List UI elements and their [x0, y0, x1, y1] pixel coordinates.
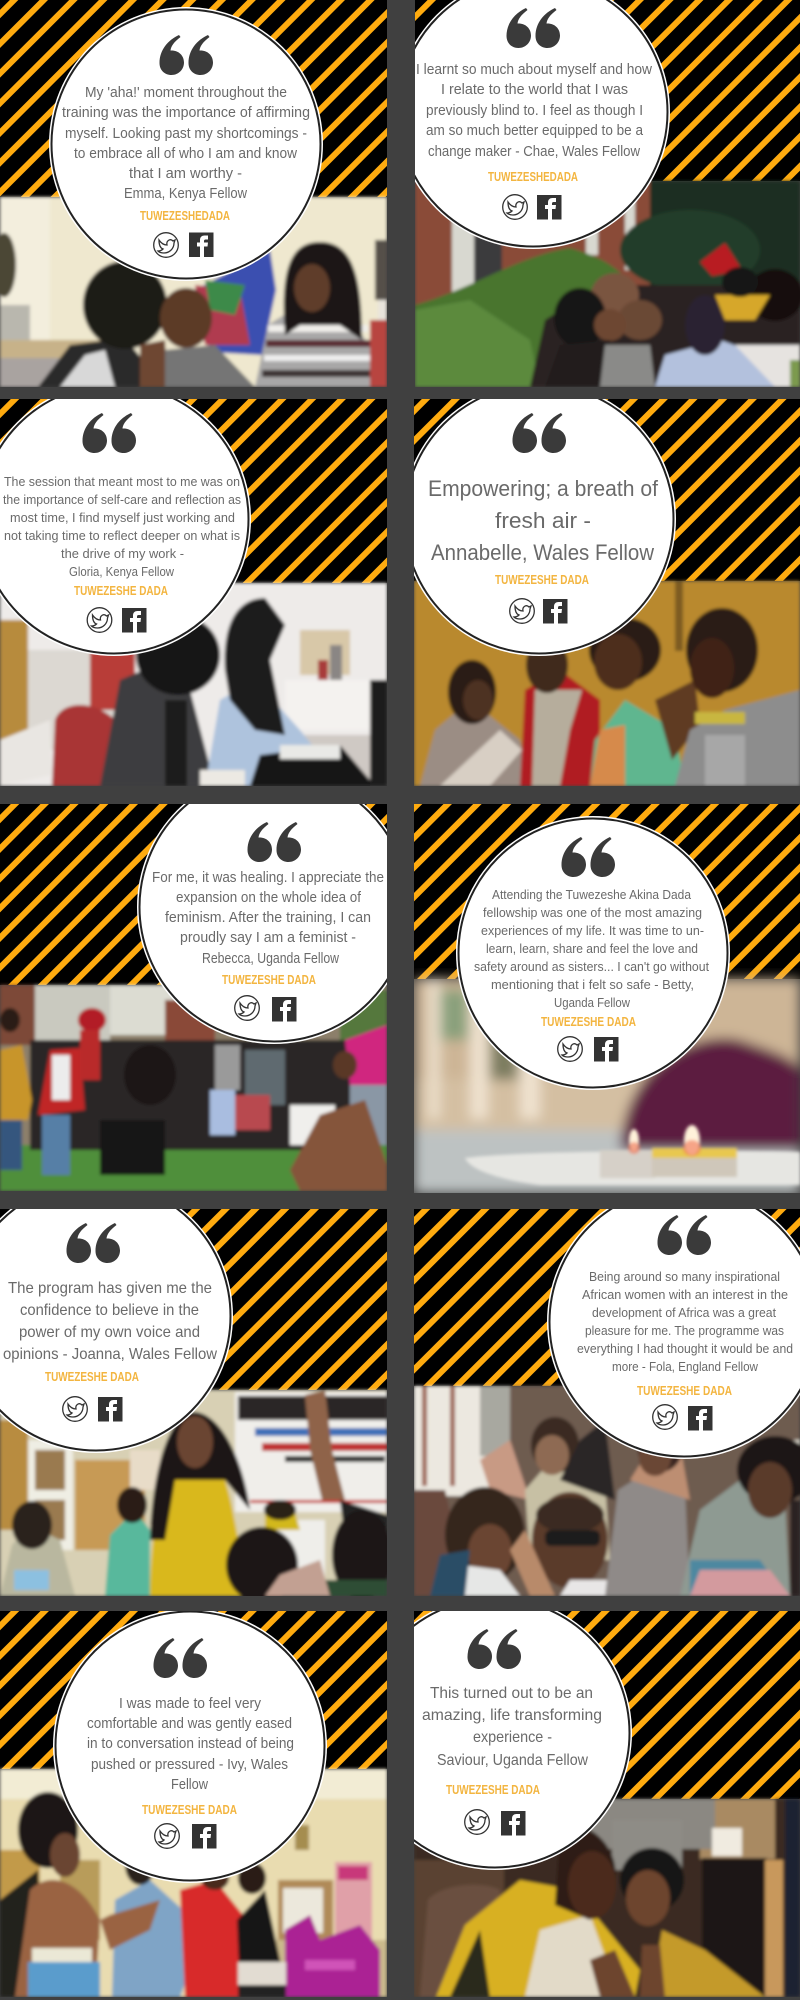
quote text: This turned out to be an — [430, 1685, 593, 1702]
photo: speaker in yellow dress — [0, 1390, 392, 1603]
icon: quotation mark — [66, 1223, 120, 1263]
photo: women talking in a room — [0, 197, 387, 387]
quote text: experience - — [473, 1729, 552, 1746]
quote text: pushed or pressured - Ivy, Wales — [91, 1756, 288, 1773]
quote text: proudly say I am a feminist - — [180, 929, 356, 946]
hashtag: TUWEZESHE DADA — [446, 1782, 540, 1797]
panel: Gloria testimonial — [0, 382, 387, 786]
quote text: Attending the Tuwezeshe Akina Dada — [492, 887, 692, 902]
quote text: African women with an interest in the — [582, 1287, 788, 1302]
quote text: more - Fola, England Fellow — [612, 1359, 759, 1374]
icon: facebook — [537, 195, 562, 220]
quote text: power of my own voice and — [19, 1324, 200, 1341]
white quote circle — [49, 7, 323, 281]
icon: facebook — [192, 1824, 216, 1848]
quote text: Empowering; a breath of — [428, 476, 659, 501]
icon: twitter — [558, 1037, 582, 1061]
quote text — [62, 84, 310, 202]
quote text — [87, 1695, 294, 1793]
icon: quotation mark — [160, 35, 213, 75]
quote text: Rebecca, Uganda Fellow — [202, 950, 339, 967]
icon: facebook — [501, 1811, 526, 1836]
icon: twitter — [63, 1397, 87, 1421]
striped band — [0, 1611, 387, 1769]
icon: quotation mark — [154, 1638, 207, 1678]
panel: Joanna testimonial — [0, 1179, 392, 1603]
quote text: My 'aha!' moment throughout the — [85, 84, 287, 101]
hashtag: TUWEZESHEDADA — [140, 208, 230, 223]
quote text: development of Africa was a great — [592, 1305, 776, 1320]
quote text — [416, 61, 652, 160]
photo: two women posing — [414, 1799, 800, 1997]
icon: facebook — [543, 599, 568, 624]
panel: Annabelle testimonial — [402, 382, 800, 786]
quote text: the drive of my work - — [61, 546, 184, 561]
quote text: pleasure for me. The programme was — [585, 1323, 784, 1338]
icon: twitter — [154, 233, 178, 257]
photo: group hug by a hedge — [415, 181, 800, 387]
icon: quotation mark — [468, 1629, 521, 1669]
icon: facebook — [122, 608, 146, 632]
quote text — [422, 1685, 602, 1769]
icon: facebook — [98, 1397, 122, 1422]
white quote circle — [53, 1609, 327, 1883]
quote text: comfortable and was gently eased — [87, 1715, 292, 1732]
panel: Saviour testimonial — [358, 1596, 800, 1997]
icon: facebook — [594, 1037, 618, 1062]
quote text: that I am worthy - — [129, 165, 242, 182]
quote text: fellowship was one of the most amazing — [483, 905, 702, 920]
panel: Ivy testimonial — [0, 1609, 387, 1997]
photo: women taking notes in a session — [0, 583, 387, 786]
quote text: Gloria, Kenya Fellow — [69, 564, 175, 579]
photo: women in a line in a hall — [0, 1769, 387, 1997]
striped band — [0, 399, 387, 583]
white quote circle — [456, 816, 730, 1090]
icon: twitter — [465, 1810, 489, 1834]
quote text: The program has given me the — [8, 1280, 212, 1297]
quote text: most time, I find myself just working and — [10, 510, 235, 525]
quote text: Saviour, Uganda Fellow — [437, 1752, 588, 1769]
striped band — [415, 0, 800, 181]
hashtag: TUWEZESHE DADA — [495, 572, 589, 587]
icon: twitter — [503, 195, 527, 219]
striped band — [414, 1611, 800, 1799]
quote text: to embrace all of who I am and know — [74, 145, 297, 162]
quote text: experiences of my life. It was time to un- — [481, 923, 704, 938]
quote text: I was made to feel very — [119, 1695, 261, 1712]
quote text: fresh air - — [495, 508, 591, 533]
panel: Rebecca testimonial — [0, 804, 387, 1191]
icon: twitter — [510, 599, 534, 623]
white quote circle — [396, 0, 670, 249]
quote text — [577, 1269, 793, 1374]
quote text: I learnt so much about myself and how — [416, 61, 652, 78]
icon: quotation mark — [658, 1215, 711, 1255]
quote text: For me, it was healing. I appreciate the — [152, 869, 384, 886]
quote text: previously blind to. I feel as though I — [426, 102, 643, 119]
white quote circle — [358, 1596, 632, 1870]
striped band — [0, 0, 387, 197]
quote text: the importance of self-care and reflection as — [3, 492, 241, 507]
quote text — [3, 1280, 217, 1363]
icon: twitter — [155, 1824, 179, 1848]
hashtag: TUWEZESHE DADA — [541, 1014, 636, 1029]
striped band — [414, 399, 800, 581]
photo: selfie on a bus — [414, 1386, 800, 1596]
icon: twitter — [87, 608, 112, 632]
quote text — [428, 476, 659, 565]
quote text: expansion on the whole idea of — [176, 889, 362, 906]
panel: Emma testimonial — [0, 0, 387, 387]
icon: twitter — [235, 996, 259, 1020]
striped band — [0, 1209, 387, 1390]
quote text — [474, 887, 709, 1010]
hashtag: TUWEZESHE DADA — [142, 1802, 237, 1817]
panel: Chae testimonial — [396, 0, 800, 387]
quote text: Uganda Fellow — [554, 995, 631, 1010]
quote text — [3, 474, 241, 579]
quote text: Being around so many inspirational — [589, 1269, 780, 1284]
quote text: change maker - Chae, Wales Fellow — [428, 143, 640, 160]
striped band — [414, 804, 800, 979]
quote text: not taking time to reflect deeper on what is — [4, 528, 240, 543]
quote text: amazing, life transforming — [422, 1707, 602, 1724]
quote text — [152, 869, 384, 967]
photo detail: plate and candle flames — [465, 1125, 800, 1185]
hashtag: TUWEZESHE DADA — [45, 1369, 139, 1384]
photo: candles on a plate — [414, 979, 800, 1193]
quote text: The session that meant most to me was on — [4, 474, 240, 489]
white quote circle — [547, 1185, 800, 1459]
panel: Betty testimonial — [414, 804, 800, 1193]
quote text: I relate to the world that I was — [441, 81, 628, 98]
striped band — [414, 1209, 800, 1386]
icon: quotation mark — [506, 8, 560, 48]
photo: group portrait on the lawn — [0, 985, 387, 1191]
quote text: mentioning that i felt so safe - Betty, — [491, 977, 694, 992]
icon: quotation mark — [82, 413, 136, 453]
hashtag: TUWEZESHE DADA — [74, 583, 168, 598]
quote text: opinions - Joanna, Wales Fellow — [3, 1346, 217, 1363]
hashtag: TUWEZESHE DADA — [637, 1383, 732, 1398]
white quote circle — [414, 399, 676, 656]
quote text: am so much better equipped to be a — [426, 122, 644, 139]
icon: facebook — [688, 1406, 712, 1430]
panel: Fola testimonial — [414, 1185, 800, 1596]
icon: quotation mark — [562, 837, 615, 877]
quote text: Fellow — [171, 1776, 208, 1793]
quote text: safety around as sisters... I can't go without — [474, 959, 709, 974]
hashtag: TUWEZESHEDADA — [488, 169, 578, 184]
icon: facebook — [272, 997, 296, 1022]
white quote circle — [0, 1179, 233, 1453]
quote text: training was the importance of affirming — [62, 104, 310, 121]
striped band — [0, 804, 387, 985]
quote text: Annabelle, Wales Fellow — [431, 540, 654, 565]
white quote circle — [137, 804, 387, 1044]
white quote circle — [0, 382, 251, 656]
icon: quotation mark — [248, 822, 301, 862]
quote text: feminism. After the training, I can — [165, 909, 371, 926]
quote text: learn, learn, share and feel the love and — [486, 941, 698, 956]
quote text: confidence to believe in the — [20, 1302, 199, 1319]
icon: quotation mark — [512, 413, 566, 453]
photo: four women close together — [414, 581, 800, 786]
quote text: in to conversation instead of being — [87, 1735, 294, 1752]
icon: facebook — [189, 232, 214, 257]
hashtag: TUWEZESHE DADA — [222, 972, 316, 987]
quote text: Emma, Kenya Fellow — [124, 185, 247, 202]
icon: twitter — [653, 1405, 677, 1429]
quote text: myself. Looking past my shortcomings - — [65, 125, 307, 142]
